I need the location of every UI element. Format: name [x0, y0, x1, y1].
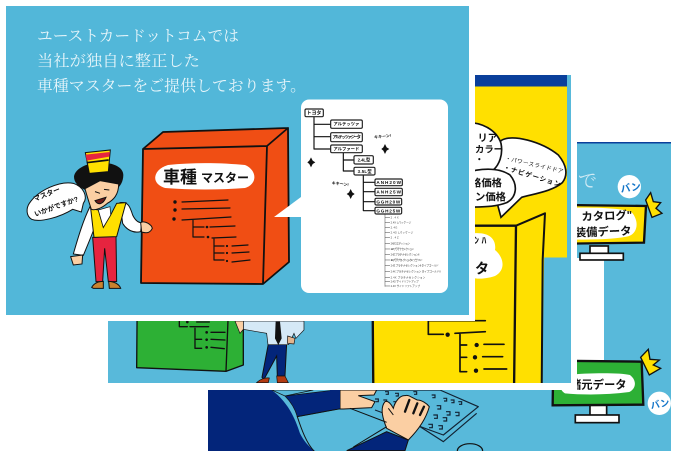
- title: ユーストカードットコムでは: [37, 28, 239, 45]
- text: sparkle sound effects: キキーン!: [374, 133, 391, 140]
- icon: catalog monitor: 装備データ: [575, 224, 632, 240]
- chart: vehicle master tree: 2.4Z Gエディション: [391, 241, 410, 245]
- chart: vehicle master tree: 2.4X Lパッケージ: [391, 220, 412, 224]
- callout: マスターいかがですか?: [27, 183, 85, 220]
- text: sparkle sound effects: [332, 133, 391, 187]
- callouts: equipment speech bubbles: 格価格: [471, 177, 503, 190]
- chart: vehicle master tree: 2.4L型: [358, 157, 371, 163]
- callout: area and color: [475, 122, 502, 170]
- callout: マスターいかがですか?: いかがですか?: [33, 194, 79, 219]
- chart: vehicle master tree: トヨタ: [307, 110, 321, 117]
- chart: vehicle master tree: 2.4X プラチナセレクション タイプゴールドII: [391, 270, 441, 274]
- text: sparkle sound effects: キキーン!: [332, 180, 349, 187]
- icon: keyboard and typing hands: [330, 390, 483, 457]
- callout: マスターいかがですか?: マスター: [32, 185, 61, 204]
- chart: vehicle master tree: 2.4G プラチナセレクション タイプゴールド: [391, 258, 423, 262]
- title: 車種マスターをご提供しております。: [37, 76, 306, 95]
- label: 車種マスター: [155, 163, 254, 190]
- chart: vehicle master tree: 2.4Z プラチナセレクションII: [391, 252, 420, 256]
- icon: catalog monitor: バン: [620, 181, 642, 195]
- illustration: bellhop character: [27, 150, 152, 288]
- chart: vehicle master tree: 2.4X サイドリフトアップ: [391, 284, 420, 288]
- callouts: equipment speech bubbles: ・パワースライドドア: [505, 155, 564, 175]
- chart: vehicle master tree: 2.4X プラチナセレクション: [391, 275, 426, 279]
- text: partial slide heading: で: [578, 171, 597, 192]
- illustration: red master box: [141, 128, 289, 284]
- callout: power slide door and navigation: [494, 138, 566, 217]
- chart: vehicle master tree: GGH25W: [376, 208, 401, 213]
- chart: vehicle master tree: 2.4G Lパッケージ: [391, 231, 414, 235]
- callouts: equipment speech bubbles: カラー: [475, 145, 503, 155]
- panel: front slide: [0, 0, 475, 321]
- illustration: man in blue shirt: [235, 321, 304, 383]
- chart: tree list on yellow box: [428, 320, 507, 373]
- callout: prices: [475, 168, 516, 208]
- callouts: equipment speech bubbles: ・ナビゲーション: [502, 163, 562, 189]
- callouts: equipment speech bubbles: リア: [478, 133, 498, 145]
- chart: vehicle master tree: 3.5L型: [358, 168, 372, 174]
- callout: vehicle tree panel: [274, 100, 448, 293]
- icon: specification monitor: バン: [650, 398, 670, 411]
- label: 車種マスター: 車種: [163, 168, 197, 187]
- icon: specification monitor: 諸元データ: [570, 378, 627, 392]
- chart: vehicle master tree: 2.4G サイドリフトアップ: [391, 280, 419, 284]
- chart: vehicle master tree: ANH25W: [376, 190, 402, 195]
- chart: vehicle master tree: 2.4Z プラチナセレクション: [391, 247, 414, 251]
- title: [37, 28, 306, 95]
- chart: vehicle master tree: アルテッツァジータ: [332, 134, 361, 141]
- illustration: yellow box: [372, 212, 545, 393]
- chart: vehicle master tree: ANH20W: [376, 180, 402, 185]
- chart: tree glyph on box: [172, 200, 250, 262]
- chart: vehicle master tree: 2.4G: [391, 225, 397, 229]
- illustration: person in navy suit at desk: [208, 389, 341, 451]
- chart: vehicle master tree: 2.4Z プラチナセレクションII タイプゴールド: [391, 264, 439, 268]
- callouts: equipment speech bubbles: ・: [475, 155, 484, 165]
- chart: vehicle master tree: アルテッツァ: [333, 122, 359, 128]
- chart: vehicle master tree: 2.4X: [391, 216, 399, 220]
- title: 当社が独自に整正した: [37, 51, 200, 70]
- icon: catalog monitor: カタログ": [581, 208, 632, 224]
- illustration: yellow box: ﾝ ﾊ: [474, 235, 487, 245]
- icon: specification monitor: [553, 349, 671, 423]
- chart: vehicle master tree: アルファード: [333, 146, 359, 152]
- icon: sparkles: [307, 144, 389, 199]
- chart: vehicle master tree: 2.4Z: [391, 236, 399, 240]
- white frame of middle slide: [571, 75, 577, 390]
- illustration: yellow box: タ: [475, 260, 489, 276]
- panel: back slide with monitors and keyboard: [208, 142, 671, 457]
- callouts: equipment speech bubbles: ン価格: [475, 191, 507, 204]
- panel: middle slide with yellow box and green box: [108, 75, 571, 393]
- callouts: equipment speech bubbles: [465, 123, 566, 217]
- label: 車種マスター: マスター: [201, 171, 249, 185]
- illustration: green box: [136, 321, 244, 372]
- chart: vehicle master tree: GGH20W: [376, 199, 401, 204]
- chart: vehicle master tree: [305, 109, 441, 288]
- icon: catalog monitor: [577, 175, 664, 261]
